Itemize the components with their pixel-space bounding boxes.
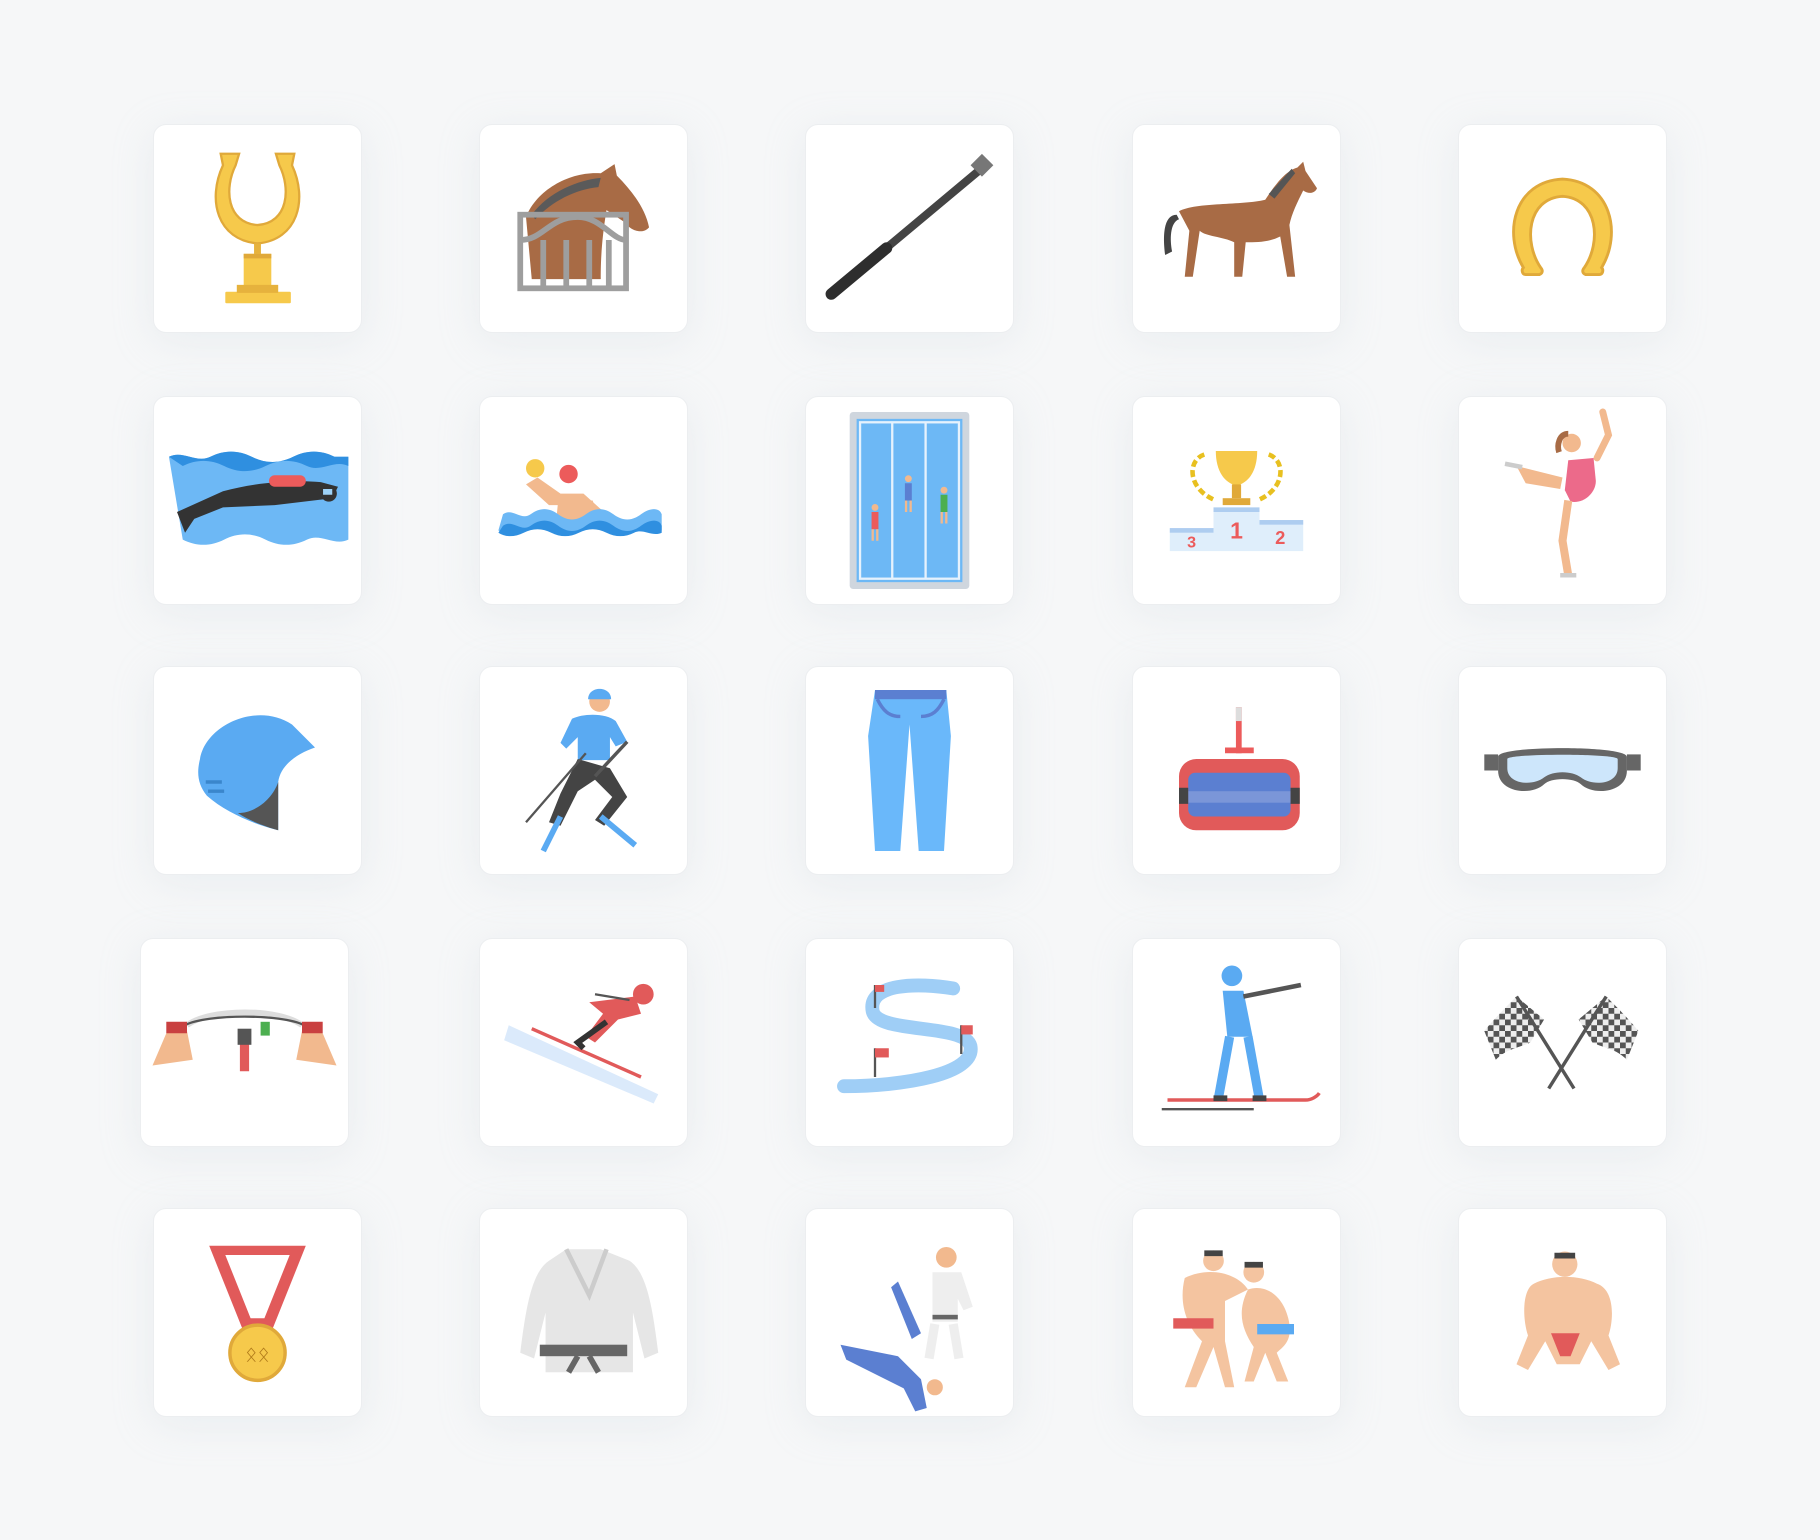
icon: downhill skier: [504, 984, 658, 1103]
card: medal: [153, 1208, 362, 1417]
icon: skier: [526, 689, 635, 851]
card: slalom course: [805, 938, 1014, 1147]
card: helmet: [153, 666, 362, 875]
card: gondola: [1132, 666, 1341, 875]
card: sumo wrestlers: [1132, 1208, 1341, 1417]
icon: horse: [1164, 162, 1317, 277]
card: water polo: [479, 396, 688, 605]
icon: gold medal: [209, 1246, 306, 1380]
icon: water polo player: [498, 459, 662, 536]
icon: ski helmet: [198, 715, 315, 830]
card: podium: [1132, 396, 1341, 605]
card: skier: [479, 666, 688, 875]
icon: pool lanes: [850, 412, 969, 589]
card: bike handlebar: [140, 938, 349, 1147]
card: checkered flags: [1458, 938, 1667, 1147]
icon: crouching sumo wrestler: [1516, 1252, 1620, 1370]
icon: gold medal: ᛟᛟ: [245, 1343, 270, 1366]
card: sumo: [1458, 1208, 1667, 1417]
card: horse in stall: [479, 124, 688, 333]
card: horseshoe trophy: [153, 124, 362, 333]
card: horse: [1132, 124, 1341, 333]
icon: horse stall: [520, 164, 649, 288]
icon: podium with trophy: 3: [1187, 534, 1196, 552]
card: judo gi: [479, 1208, 688, 1417]
card: ski pants: [805, 666, 1014, 875]
icon: pants: [868, 690, 951, 851]
icon: podium with trophy: 2: [1275, 527, 1285, 548]
icon: two sumo wrestlers: [1173, 1250, 1294, 1387]
icon: podium with trophy: 1: [1230, 517, 1243, 543]
icon: judo fighters: [840, 1247, 973, 1411]
icon: handlebar: [152, 1012, 336, 1071]
icon: figure skater: [1505, 412, 1608, 575]
card: swimming pool: [805, 396, 1014, 605]
card: ski jumper: [479, 938, 688, 1147]
icon: diver underwater: [169, 452, 348, 545]
icon: horseshoe: [1514, 179, 1611, 274]
icon: horseshoe trophy: [216, 154, 299, 303]
icon: slalom track: [844, 985, 973, 1086]
icon: cable car: [1179, 707, 1300, 830]
card: horseshoe: [1458, 124, 1667, 333]
card: rowing oar: [805, 124, 1014, 333]
icon: podium with trophy: [1170, 451, 1303, 552]
card: scuba diver: [153, 396, 362, 605]
card: figure skater: [1458, 396, 1667, 605]
icon: ski goggles: [1484, 748, 1641, 791]
card: biathlon: [1132, 938, 1341, 1147]
icon: kimono: [520, 1249, 658, 1372]
card: goggles: [1458, 666, 1667, 875]
icon: oar: [831, 154, 993, 294]
card: judo throw: [805, 1208, 1014, 1417]
icon: biathlete: [1162, 965, 1319, 1109]
